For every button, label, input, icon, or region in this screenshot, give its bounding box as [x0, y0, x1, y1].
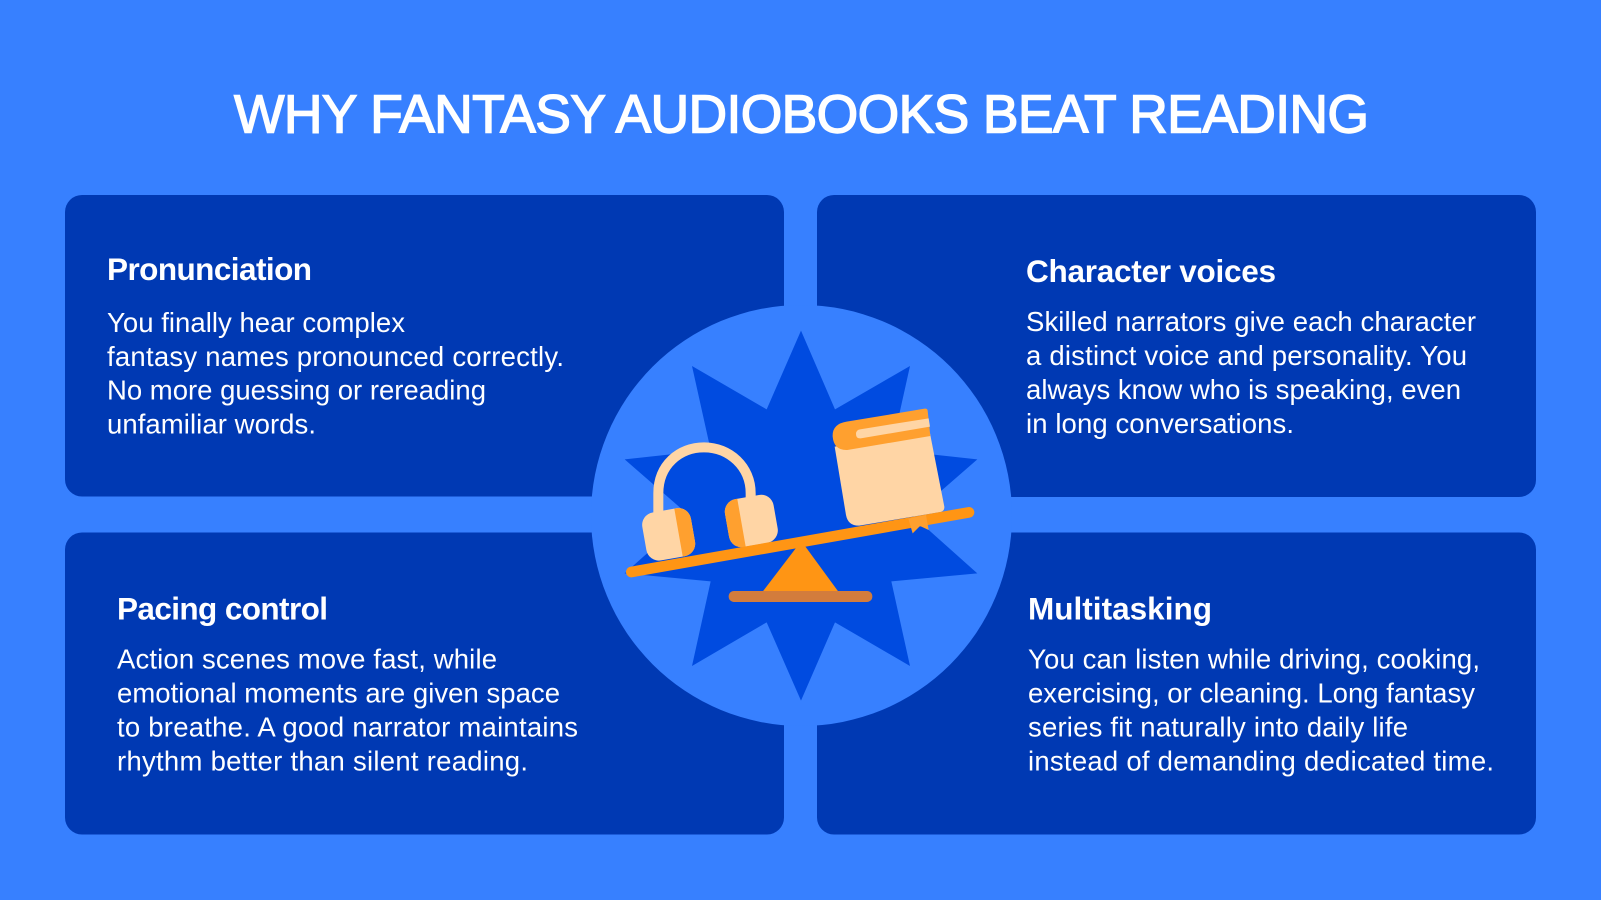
- text block: character voices: always know who is speaking, even: [1026, 374, 1461, 405]
- panel: multitasking: [817, 532, 1536, 834]
- panel: character voices: [817, 195, 1536, 497]
- icon: headphones: [640, 447, 780, 563]
- icon: seesaw fulcrum: [729, 541, 872, 602]
- heading: pronunciation: Pronunciation: [107, 251, 312, 287]
- text block: multitasking: instead of demanding dedicated time.: [1028, 745, 1494, 776]
- panel: pacing control: [65, 532, 784, 834]
- central illustration: [591, 305, 1012, 726]
- text block: pacing control: Action scenes move fast, while: [117, 644, 497, 674]
- text block: multitasking: You can listen while driving, cooking,: [1028, 644, 1480, 674]
- title: WHY FANTASY AUDIOBOOKS BEAT READING: [234, 86, 1369, 145]
- text block: pronunciation: fantasy names pronounced correctly.: [107, 341, 564, 372]
- icon: starburst: [625, 331, 977, 701]
- text block: pronunciation: You finally hear complex: [107, 307, 405, 338]
- text block: character voices: Skilled narrators give each character: [1026, 306, 1476, 337]
- text block: pronunciation: No more guessing or rereading: [107, 374, 486, 406]
- text block: multitasking: [1028, 644, 1494, 776]
- panel: pronunciation: [65, 195, 784, 496]
- icon: book: [833, 409, 944, 526]
- icon: bookmark: [908, 515, 929, 533]
- text block: pacing control: emotional moments are given space: [117, 678, 560, 708]
- text block: pronunciation: unfamiliar words.: [107, 408, 316, 440]
- heading: pacing control: Pacing control: [117, 590, 328, 626]
- text block: pacing control: [117, 644, 578, 776]
- text block: pacing control: to breathe. A good narrator maintains: [117, 711, 578, 742]
- text block: character voices: a distinct voice and personality. You: [1026, 340, 1467, 371]
- text block: multitasking: series fit naturally into daily life: [1028, 711, 1408, 742]
- text block: pronunciation: [107, 307, 564, 440]
- text block: multitasking: exercising, or cleaning. Long fantasy: [1028, 678, 1475, 708]
- heading: multitasking: Multitasking: [1028, 590, 1212, 626]
- text block: character voices: [1026, 306, 1476, 439]
- text block: character voices: in long conversations.: [1026, 408, 1294, 439]
- heading: character voices: Character voices: [1026, 253, 1276, 289]
- text block: pacing control: rhythm better than silent reading.: [117, 745, 528, 776]
- icon: seesaw beam: [631, 512, 969, 572]
